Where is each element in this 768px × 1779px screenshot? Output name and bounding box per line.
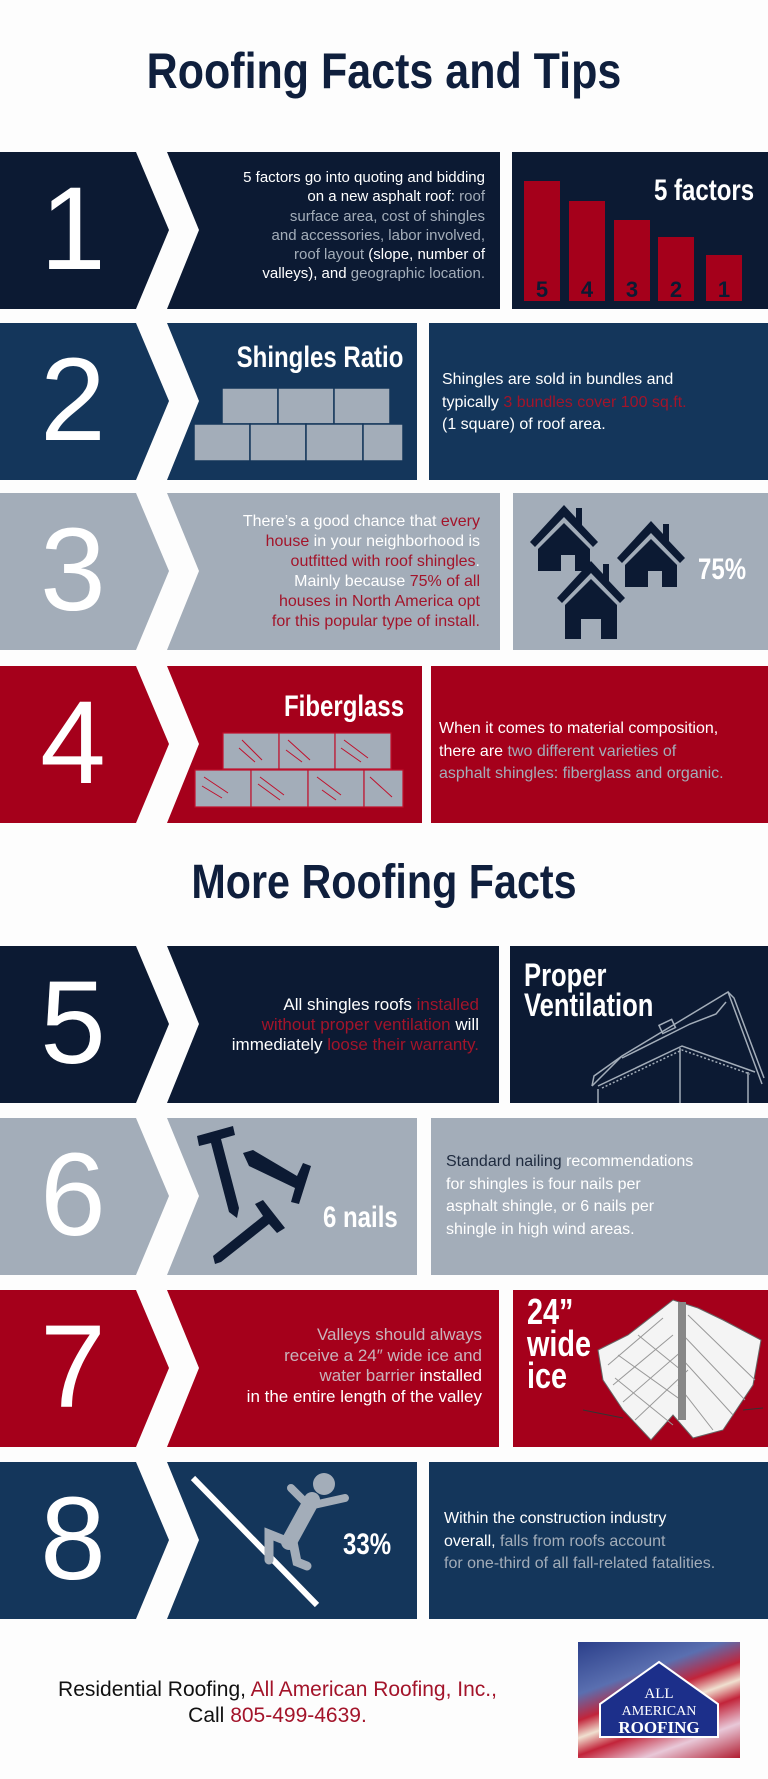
panel: 24 inch wide ice: ice: [527, 1355, 567, 1396]
logo: ROOFING: [618, 1718, 700, 1737]
panel: falls text: Within the construction industry: [444, 1510, 666, 1527]
panel: neighborhood text: houses in North America opt: [279, 593, 480, 610]
panel: proper ventilation: Ventilation: [524, 987, 653, 1023]
panel: valley text: water barrier installed: [319, 1366, 482, 1385]
panel: bar chart: 4: [581, 277, 594, 302]
panel: composition text: there are two different varieties of: [439, 742, 676, 760]
panel: valley text: Valleys should always: [317, 1325, 482, 1344]
row 5: [0, 946, 768, 1103]
title: Roofing Facts and Tips: [147, 43, 621, 99]
panel: proper ventilation: Proper: [524, 957, 607, 993]
number 3: 3: [40, 504, 106, 636]
panel: warranty text: immediately loose their warranty.: [232, 1035, 479, 1054]
number 8: 8: [40, 1473, 106, 1605]
panel: neighborhood text: [167, 493, 500, 650]
number 7: 7: [40, 1301, 106, 1433]
number 1: [0, 152, 169, 309]
row 7: [0, 1290, 768, 1447]
row 8: [0, 1462, 768, 1619]
footer contact text: [58, 1678, 497, 1727]
number 1: 1: [40, 163, 106, 295]
panel: neighborhood text: for this popular type of install.: [272, 613, 480, 630]
panel: shingles text: Shingles are sold in bundles and: [442, 371, 673, 388]
panel: houses icon: [513, 493, 768, 650]
panel: bar chart: 5 factors: [654, 174, 754, 207]
panel: nailing text: shingle in high wind areas.: [446, 1220, 635, 1238]
panel: composition text: [431, 666, 768, 823]
number 4: [0, 666, 169, 823]
panel: neighborhood text: house in your neighborhood is: [266, 533, 480, 550]
panel: fiberglass: [167, 666, 422, 823]
number 5: [0, 946, 169, 1103]
number 2: [0, 323, 169, 480]
subtitle: More Roofing Facts: [191, 856, 577, 909]
panel: 24 inch wide ice: [513, 1290, 768, 1447]
logo: AMERICAN: [622, 1704, 696, 1719]
panel: nailing text: for shingles is four nails per: [446, 1176, 641, 1192]
logo: ALL: [644, 1686, 674, 1702]
panel: fall icon: [167, 1462, 417, 1619]
row 4: [0, 666, 768, 823]
panel: falls text: [429, 1462, 768, 1619]
panel: valley text: in the entire length of the valley: [247, 1386, 482, 1406]
panel: nailing text: [431, 1118, 768, 1275]
panel: nailing text: Standard nailing recommendations: [446, 1153, 693, 1170]
number 7: [0, 1290, 169, 1447]
panel: factors text: valleys), and geographic location.: [262, 265, 485, 282]
panel: warranty text: All shingles roofs installed: [283, 995, 479, 1014]
panel: bar chart: 5: [536, 277, 548, 302]
panel: fiberglass: Fiberglass: [284, 690, 404, 723]
panel: nails: [167, 1118, 417, 1275]
logo: [578, 1642, 740, 1758]
row 1: [0, 152, 768, 309]
panel: composition text: asphalt shingles: fiberglass and organic.: [439, 765, 724, 782]
row 3: [0, 493, 768, 650]
panel: warranty text: without proper ventilation will: [262, 1015, 479, 1034]
footer contact text: Residential Roofing, All American Roofing, Inc.,: [58, 1678, 497, 1701]
panel: factors text: roof layout (slope, number of: [294, 246, 485, 263]
panel: shingles ratio: Shingles Ratio: [236, 341, 403, 374]
number 5: 5: [40, 957, 106, 1089]
panel: warranty text: [167, 946, 499, 1103]
row 2: [0, 323, 768, 480]
panel: falls text: overall, falls from roofs account: [444, 1532, 665, 1550]
panel: bar chart: 3: [626, 277, 638, 302]
panel: nails: 6 nails: [323, 1201, 398, 1234]
panel: 24 inch wide ice: 24”: [527, 1291, 573, 1332]
footer contact text: Call 805-499-4639.: [188, 1704, 367, 1727]
row 6: [0, 1118, 768, 1275]
number 6: 6: [40, 1129, 106, 1261]
panel: neighborhood text: Mainly because 75% of all: [294, 573, 480, 590]
panel: factors text: on a new asphalt roof: roof: [307, 188, 485, 205]
panel: falls text: for one-third of all fall-related fatalities.: [444, 1555, 715, 1572]
number 4: 4: [40, 677, 106, 809]
panel: shingles text: [429, 323, 768, 480]
panel: nailing text: asphalt shingle, or 6 nails per: [446, 1198, 654, 1215]
number 8: [0, 1462, 169, 1619]
panel: shingles text: (1 square) of roof area.: [442, 416, 606, 433]
panel: valley text: receive a 24″ wide ice and: [284, 1346, 482, 1364]
panel: bar chart: [512, 152, 768, 309]
panel: houses icon: 75%: [698, 553, 746, 586]
panel: factors text: and accessories, labor involved,: [272, 227, 485, 244]
panel: proper ventilation: [510, 946, 768, 1103]
panel: shingles text: typically 3 bundles cover 100 sq.ft.: [442, 394, 687, 410]
panel: fall icon: 33%: [343, 1528, 391, 1561]
panel: valley text: [167, 1290, 499, 1447]
panel: composition text: When it comes to material composition,: [439, 720, 718, 737]
panel: factors text: surface area, cost of shingles: [290, 208, 485, 225]
panel: shingles ratio: [167, 323, 417, 480]
panel: factors text: [167, 152, 500, 309]
panel: factors text: 5 factors go into quoting and bidding: [243, 169, 485, 186]
panel: 24 inch wide ice: wide: [527, 1323, 591, 1364]
number 2: 2: [40, 334, 106, 466]
number 3: [0, 493, 169, 650]
panel: bar chart: 1: [718, 277, 730, 302]
panel: neighborhood text: There’s a good chance that every: [243, 513, 480, 530]
number 6: [0, 1118, 169, 1275]
panel: neighborhood text: outfitted with roof shingles.: [291, 553, 480, 570]
panel: bar chart: 2: [670, 277, 682, 302]
